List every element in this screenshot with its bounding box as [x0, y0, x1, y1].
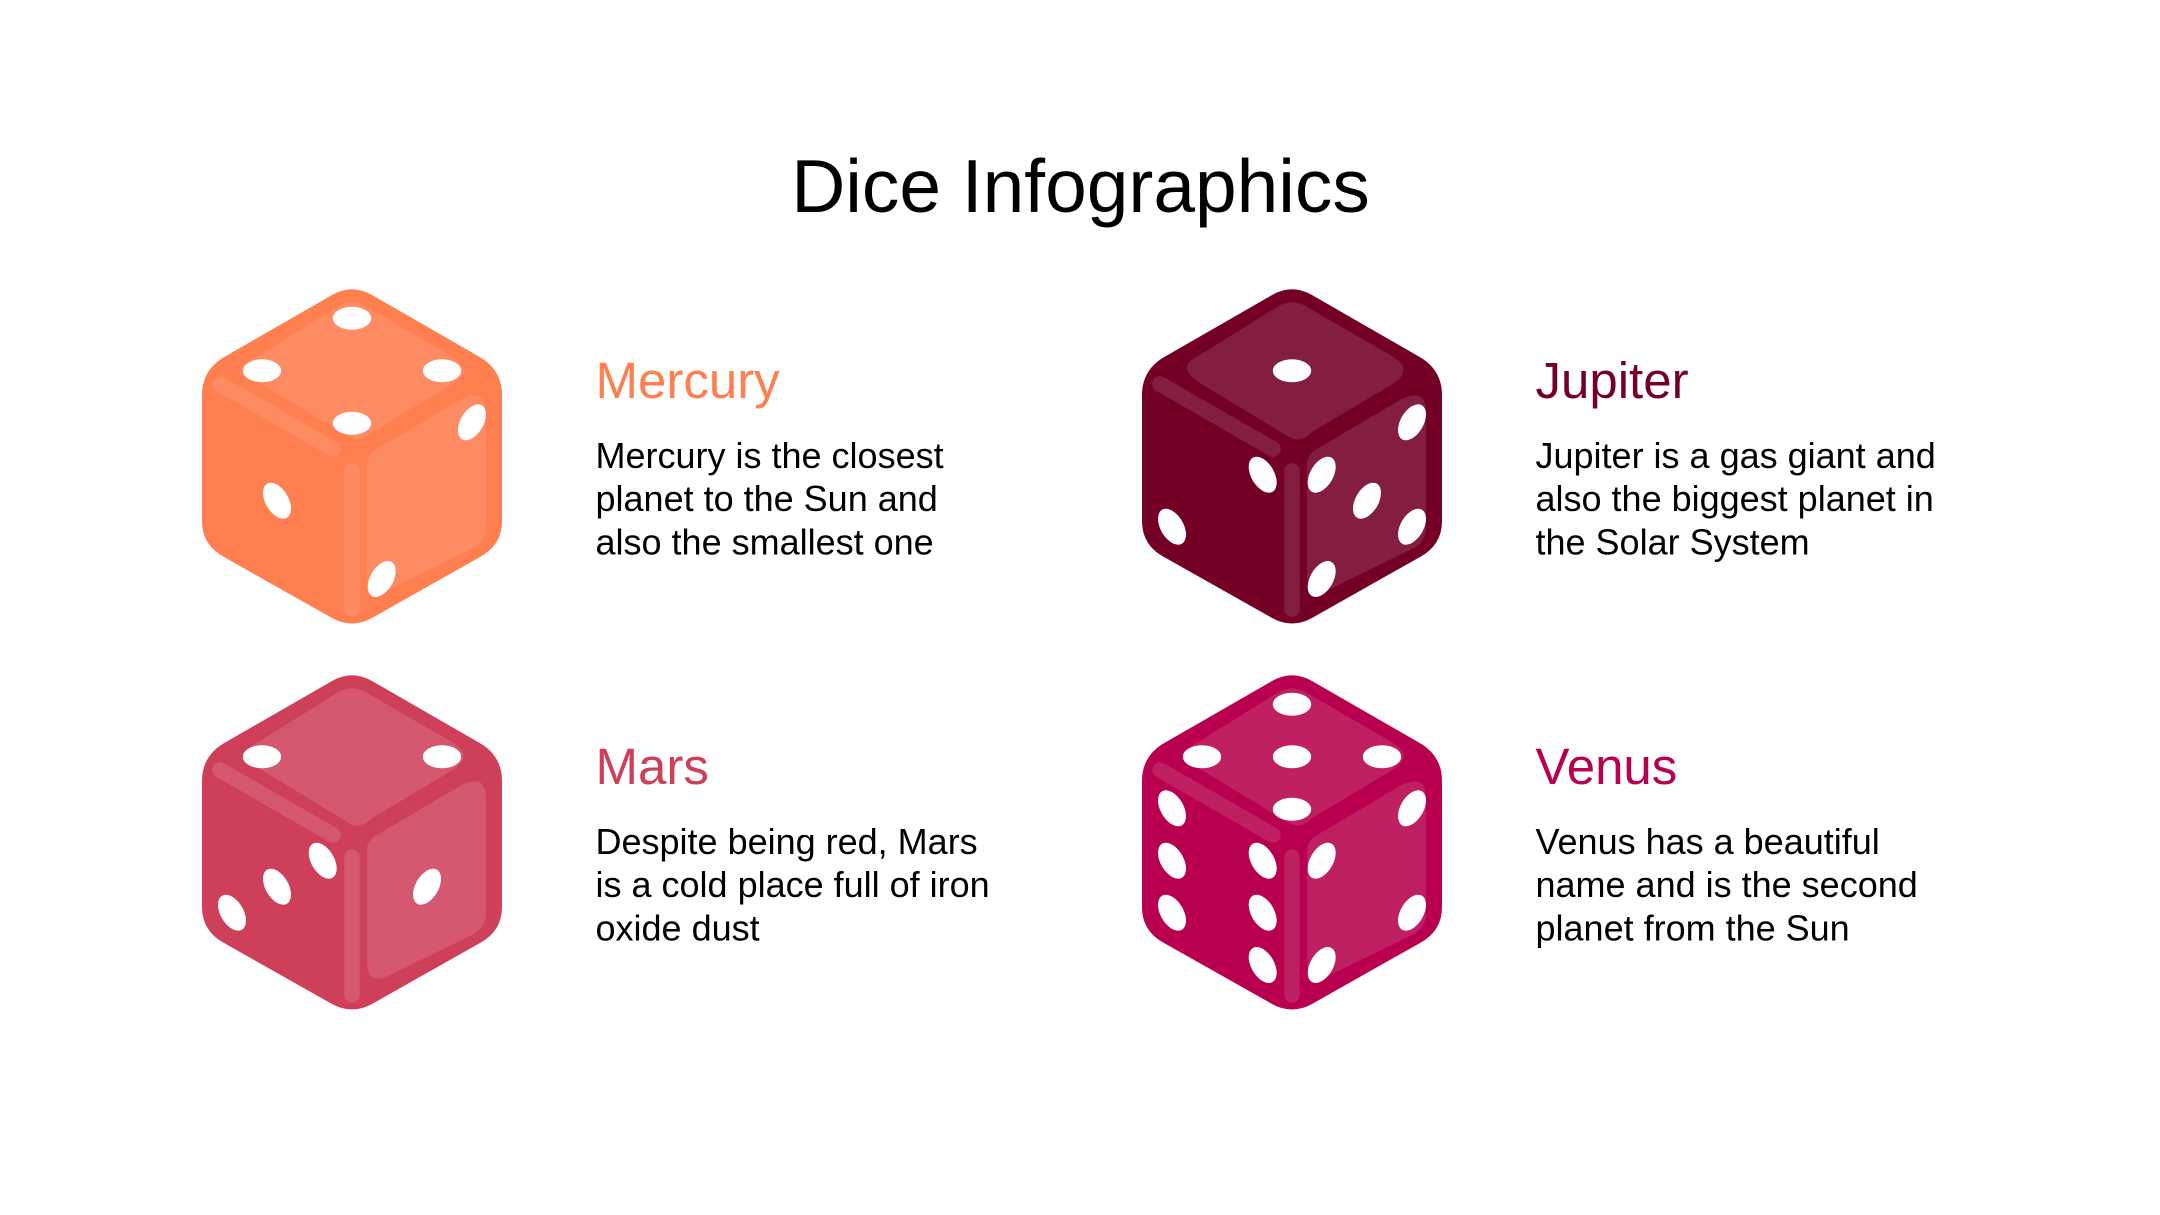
- heading: Venus: Venus: [1536, 738, 1677, 795]
- text block: Mercury: also the smallest one: [596, 521, 934, 562]
- title: Dice Infographics: [791, 144, 1370, 228]
- text block: Venus: planet from the Sun: [1536, 907, 1850, 948]
- text block: Mercury: Mercury is the closest: [596, 435, 944, 476]
- icon: Venus die showing 5, 6, 4: [1142, 675, 1442, 1010]
- heading: Jupiter: Jupiter: [1536, 352, 1689, 409]
- text block: Mercury: planet to the Sun and: [596, 478, 938, 519]
- text block: Jupiter: also the biggest planet in: [1536, 478, 1934, 519]
- text block: Mars: oxide dust: [596, 907, 760, 948]
- text block: Mars: Despite being red, Mars: [596, 821, 978, 862]
- panel: Mars: [202, 675, 990, 1010]
- text block: Jupiter: the Solar System: [1536, 521, 1810, 562]
- panel: Jupiter: [1142, 289, 1936, 624]
- text block: Jupiter: Jupiter is a gas giant and: [1536, 435, 1936, 476]
- text block: Venus: name and is the second: [1536, 864, 1918, 905]
- text block: Venus: Venus has a beautiful: [1536, 821, 1880, 862]
- icon: Mars die showing 2, 3, 1: [202, 675, 502, 1010]
- icon: Jupiter die showing 1, 2, 5: [1142, 289, 1442, 624]
- heading: Mercury: Mercury: [596, 352, 780, 409]
- icon: Mercury die showing 4, 1, 2: [202, 289, 502, 624]
- heading: Mars: Mars: [596, 738, 709, 795]
- panel: Mercury: [202, 289, 944, 624]
- panel: Venus: [1142, 675, 1918, 1010]
- text block: Mars: is a cold place full of iron: [596, 864, 990, 905]
